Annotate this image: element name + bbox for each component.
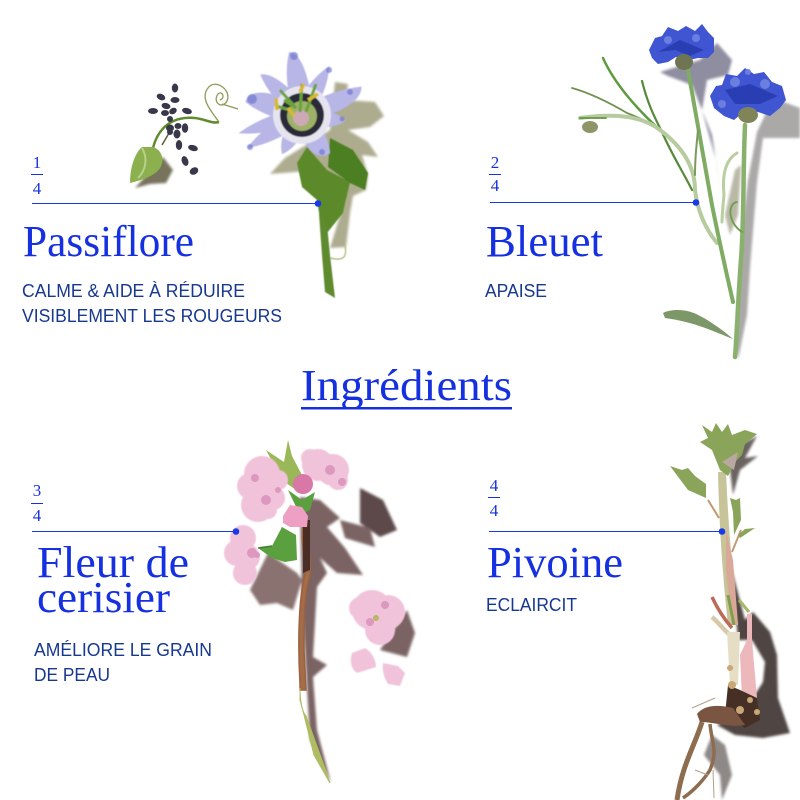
- pointer line: [32, 528, 239, 535]
- panel: pivoine: [486, 423, 790, 800]
- description: [34, 640, 212, 685]
- fraction 2/4: 2: [491, 153, 499, 172]
- fraction 4/4: 4: [490, 501, 499, 520]
- panel: passiflore: [22, 50, 384, 326]
- pointer line: [32, 200, 321, 207]
- icon: cherry blossom illustration: [224, 440, 415, 783]
- title: Ingrédients: [301, 361, 512, 410]
- description: CALME & AIDE À RÉDUIRE: [22, 281, 245, 301]
- fraction 1/4: 4: [33, 179, 42, 198]
- fraction 3/4: 4: [33, 506, 42, 525]
- fraction 2/4: 4: [491, 176, 500, 195]
- panel: fleur de cerisier: [31, 440, 415, 783]
- heading: Pivoine: [487, 538, 623, 587]
- fraction 2/4: [489, 153, 501, 195]
- fraction 3/4: 3: [33, 481, 41, 500]
- heading: cerisier: [37, 573, 170, 622]
- description: ECLAIRCIT: [486, 595, 577, 615]
- pointer line: [490, 199, 699, 206]
- heading: [37, 538, 189, 622]
- fraction 3/4: [31, 481, 43, 525]
- description: DE PEAU: [34, 665, 110, 685]
- description: APAISE: [485, 281, 547, 301]
- description: AMÉLIORE LE GRAIN: [34, 640, 212, 660]
- icon: passion flower illustration: [130, 50, 384, 298]
- heading: Fleur de: [37, 538, 189, 587]
- description: [22, 281, 282, 326]
- fraction 4/4: [488, 476, 500, 520]
- fraction 1/4: [31, 153, 43, 198]
- heading: Passiflore: [23, 217, 194, 266]
- description: VISIBLEMENT LES ROUGEURS: [22, 306, 282, 326]
- fraction 4/4: 4: [490, 476, 499, 495]
- panel: bleuet: [485, 24, 800, 360]
- icon: cornflower illustration: [572, 24, 800, 360]
- fraction 1/4: 1: [33, 153, 41, 172]
- icon: peony root illustration: [670, 423, 790, 800]
- pointer line: [489, 528, 725, 535]
- heading: Bleuet: [486, 217, 603, 266]
